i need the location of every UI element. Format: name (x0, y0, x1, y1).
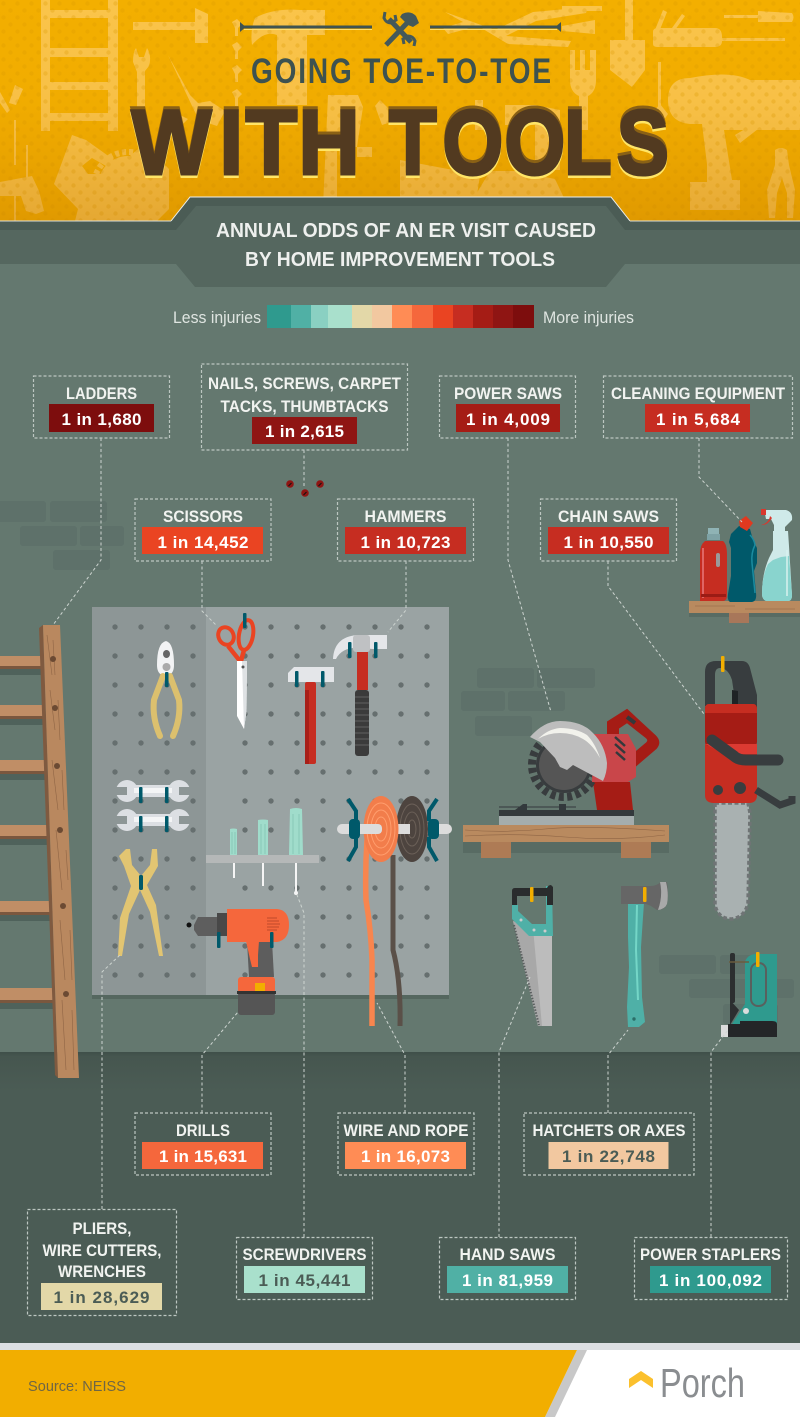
pegboard panel (92, 607, 452, 1026)
callout: pliers, wire cutters, wrenches: WIRE CUTTERS, (42, 1241, 162, 1260)
legend: colour scale (173, 305, 634, 328)
callout: hatchets or axes: HATCHETS OR AXES (532, 1121, 686, 1140)
callout: screwdrivers (236, 1238, 372, 1300)
floor (0, 1052, 800, 1343)
callout: screwdrivers: SCREWDRIVERS (242, 1245, 366, 1264)
icon: power saw on shelf (463, 710, 669, 858)
callout: nails: NAILS, SCREWS, CARPET (208, 374, 402, 393)
callout: power staplers: 1 in 100,092 (659, 1271, 762, 1290)
icon: cleaning bottles on shelf (689, 509, 800, 623)
callout: ladders: 1 in 1,680 (62, 410, 142, 429)
title: with tools: TOOLS (389, 89, 669, 191)
icon: hand saw (512, 885, 553, 1026)
callout: nails (202, 364, 408, 450)
source text: Source: NEISS (28, 1378, 126, 1395)
callout: pliers, wire cutters, wrenches: 1 in 28,629 (54, 1288, 150, 1307)
icon: screwdrivers (206, 808, 319, 895)
callout: drills: DRILLS (176, 1121, 230, 1140)
callout: chain saws: CHAIN SAWS (558, 507, 659, 526)
icon: scissors (215, 613, 255, 729)
title: with tools: TOOLS (389, 92, 669, 194)
callout: cleaning equipment (604, 376, 792, 438)
icon: chain saw (705, 656, 792, 919)
callout: hammers: HAMMERS (364, 507, 446, 526)
title: going toe-to-toe: GOING TOE-TO-TOE (251, 51, 551, 91)
callout: ladders (34, 376, 170, 438)
callout: hatchets or axes (524, 1113, 694, 1175)
callout: power saws: 1 in 4,009 (466, 410, 550, 429)
callout: scissors: 1 in 14,452 (158, 533, 248, 552)
footer (0, 1343, 800, 1417)
icon: hatchet (621, 882, 668, 1027)
icon: wrenches (114, 780, 192, 832)
icon: drill (186, 909, 289, 1015)
callout: pliers, wire cutters, wrenches: WRENCHES (58, 1262, 146, 1281)
callout: power staplers: POWER STAPLERS (640, 1245, 781, 1264)
red bottle (700, 528, 727, 601)
subtitle text: ANNUAL ODDS OF AN ER VISIT CAUSED (216, 220, 596, 242)
wall bricks (0, 501, 794, 1024)
callout: cleaning equipment: CLEANING EQUIPMENT (611, 384, 786, 403)
porch logo: Porch (660, 1360, 745, 1406)
title: with tools: TOOLS (389, 95, 669, 197)
title: with tools: WITH (131, 93, 360, 196)
icon: power stapler (721, 952, 777, 1037)
spray bottle (765, 510, 792, 531)
icon: ladder (0, 625, 79, 1078)
subtitle banner (0, 197, 800, 287)
callout: wire and rope: 1 in 16,073 (361, 1147, 450, 1166)
icon: scattered nails (286, 480, 324, 497)
callout: hammers (338, 499, 474, 561)
icon: claw hammer (333, 635, 387, 756)
callout: hand saws: HAND SAWS (460, 1245, 556, 1264)
callout: pliers, wire cutters, wrenches (28, 1210, 176, 1316)
icon: hammer (288, 667, 334, 764)
callout: screwdrivers: 1 in 45,441 (258, 1271, 350, 1290)
icon: wire and rope (337, 796, 452, 1026)
callout: hammers: 1 in 10,723 (360, 533, 450, 552)
callout: hatchets or axes: 1 in 22,748 (562, 1147, 655, 1166)
legend: colour scale: Less injuries (173, 309, 261, 327)
icon: wire cutters (118, 849, 163, 956)
callout: cleaning equipment: 1 in 5,684 (656, 410, 741, 429)
callout: drills (135, 1113, 271, 1175)
callout: scissors (135, 499, 271, 561)
legend: colour scale: More injuries (543, 309, 634, 327)
title: with tools: WITH (131, 88, 360, 191)
callout: power staplers (634, 1238, 788, 1300)
wall background (0, 221, 800, 1052)
callout: pliers, wire cutters, wrenches: PLIERS, (72, 1219, 132, 1238)
callout: nails: 1 in 2,615 (265, 422, 344, 441)
callout: wire and rope: WIRE AND ROPE (344, 1121, 468, 1140)
title: with tools (131, 88, 669, 197)
header panel (0, 0, 800, 241)
callout: drills: 1 in 15,631 (159, 1147, 247, 1166)
icon: pliers (154, 641, 179, 736)
connector lines (53, 438, 742, 1237)
callout: ladders: LADDERS (66, 384, 137, 403)
callout: scissors: SCISSORS (163, 507, 243, 526)
subtitle text (216, 220, 596, 271)
callout: hand saws (440, 1238, 576, 1300)
title: with tools: WITH (131, 91, 360, 194)
callout: power saws (440, 376, 576, 438)
tool silhouettes (0, 0, 800, 241)
callout: wire and rope (338, 1113, 474, 1175)
callout: chain saws (540, 499, 676, 561)
teal bottle (728, 526, 757, 602)
callout: nails: TACKS, THUMBTACKS (220, 397, 388, 416)
porch logo (629, 1360, 745, 1406)
icon: crossed hammer and wrench (384, 12, 419, 46)
callout: power saws: POWER SAWS (454, 384, 562, 403)
subtitle text: BY HOME IMPROVEMENT TOOLS (245, 249, 555, 271)
callout: hand saws: 1 in 81,959 (462, 1271, 553, 1290)
callout: chain saws: 1 in 10,550 (564, 533, 654, 552)
header ornament (240, 12, 561, 46)
